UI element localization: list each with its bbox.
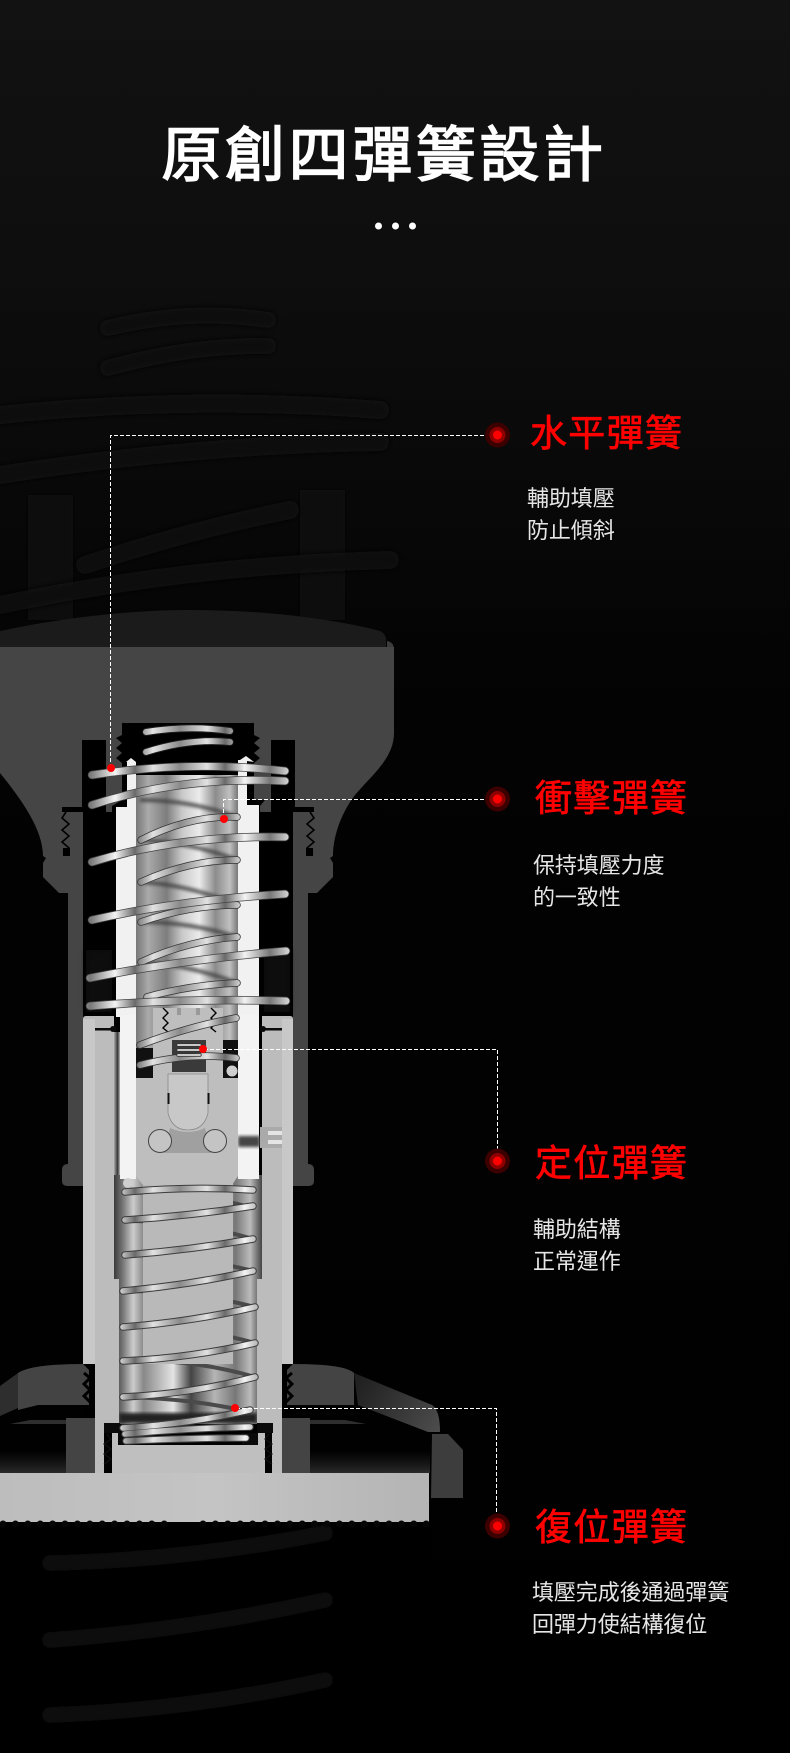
callout: 衝擊彈簧	[485, 778, 688, 910]
dome cap	[0, 610, 386, 647]
threaded plug	[112, 1433, 265, 1473]
small steel balls	[123, 1066, 238, 1188]
upper tabs	[177, 1008, 200, 1015]
sleeve slits	[95, 1026, 282, 1032]
callout line: return spring	[236, 1408, 496, 1515]
ghost reflection: lower spring	[0, 1520, 430, 1753]
plunger	[136, 1008, 238, 1185]
handle body	[0, 647, 394, 1186]
description: 的一致性	[533, 885, 621, 910]
right arm	[282, 1364, 463, 1498]
description: 輔助結構	[533, 1217, 621, 1242]
description: 保持填壓力度	[533, 853, 665, 878]
callout line: positioning spring	[204, 1050, 498, 1150]
description: 回彈力使結構復位	[532, 1612, 707, 1637]
top coils	[146, 728, 230, 752]
base plate	[0, 1473, 429, 1522]
spring chamber	[136, 1008, 238, 1078]
marker	[485, 422, 510, 448]
left arm	[0, 1364, 95, 1473]
chamber gap	[172, 1040, 206, 1072]
chamber shadows	[136, 1040, 238, 1078]
horizontal spring	[90, 766, 286, 1006]
black gaps in handle	[62, 723, 314, 1186]
anchor dot: horizontal spring	[107, 764, 115, 772]
thread black bottoms	[63, 848, 313, 856]
white bars lower	[120, 1015, 259, 1179]
callout: 水平彈簧	[485, 413, 683, 543]
plug threads	[104, 1434, 272, 1464]
thread ends	[105, 1465, 272, 1473]
lower cavity	[114, 1175, 262, 1279]
heading: 定位彈簧	[535, 1143, 688, 1184]
glow on base	[0, 1450, 430, 1473]
callout: 定位彈簧	[485, 1143, 688, 1274]
cutaway: tamper cross-section	[0, 610, 463, 1524]
black thread cavity	[104, 1423, 273, 1445]
description: 正常運作	[533, 1249, 621, 1274]
marker	[485, 786, 510, 812]
description	[533, 853, 665, 910]
description: 填壓完成後通過彈簧	[532, 1580, 729, 1605]
sleeve light strips	[83, 1019, 293, 1364]
marker	[485, 1514, 510, 1538]
bottom chrome shade	[119, 1413, 257, 1423]
small zig springs	[163, 1008, 216, 1032]
title dots	[375, 222, 416, 230]
tongue slots	[168, 1093, 210, 1104]
heading: 水平彈簧	[530, 413, 683, 454]
butterfly latch	[148, 1128, 226, 1153]
positioning spring	[178, 1045, 200, 1055]
handle threads	[62, 812, 314, 853]
cap edge	[387, 641, 394, 660]
side pin	[260, 1127, 282, 1148]
return spring back loops	[122, 1193, 255, 1412]
central column	[143, 1180, 233, 1364]
title: 原創四彈簧設計	[161, 122, 607, 189]
description: 防止傾斜	[527, 518, 615, 543]
anchor dot: return spring	[231, 1404, 239, 1412]
anchor dot: impact spring	[220, 815, 228, 823]
upper coil back loops	[140, 800, 237, 983]
description	[532, 1580, 729, 1637]
base serration	[3, 1520, 429, 1528]
callout line: impact spring	[224, 800, 490, 819]
description	[527, 486, 615, 543]
description: 輔助填壓	[527, 486, 615, 511]
description	[533, 1217, 621, 1274]
tongue	[168, 1074, 208, 1130]
heading: 衝擊彈簧	[535, 778, 688, 819]
dark side reflections	[86, 950, 290, 1012]
main coils	[140, 817, 237, 1065]
slit shading	[114, 1032, 120, 1175]
inner chrome cylinder	[136, 775, 238, 1020]
return spring	[123, 1188, 255, 1441]
callout line: horizontal spring	[110, 436, 490, 768]
bar shadow	[238, 1136, 260, 1147]
outer sleeves	[83, 1016, 293, 1473]
white guide bars	[116, 756, 259, 1017]
anchor dot: positioning spring	[199, 1045, 207, 1053]
marker	[485, 1148, 510, 1174]
inner impact spring	[140, 728, 237, 1065]
ghost reflection: upper spring	[0, 316, 390, 620]
callout: 復位彈簧	[485, 1507, 729, 1637]
heading: 復位彈簧	[535, 1507, 688, 1548]
side threads on arm	[84, 1373, 292, 1402]
